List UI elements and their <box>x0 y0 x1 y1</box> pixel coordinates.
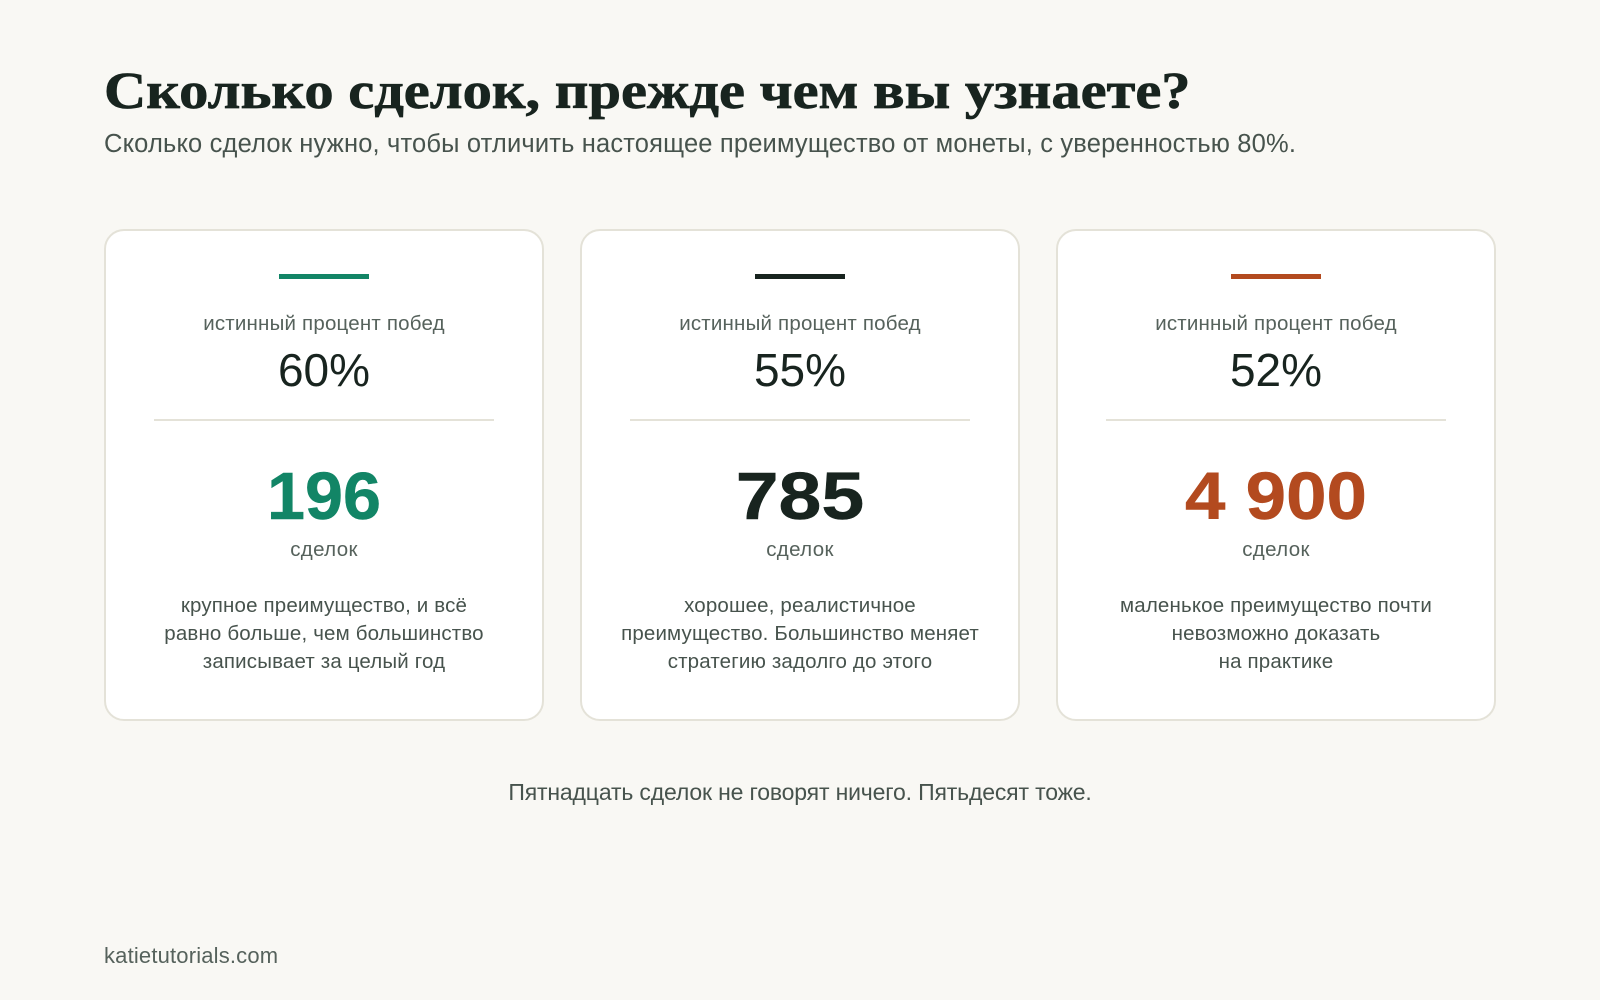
description <box>621 594 979 673</box>
description: равно больше, чем большинство <box>164 622 484 645</box>
accent bar: dark <box>755 274 845 279</box>
closing statement: Пятнадцать сделок не говорят ничего. Пятьдесят тоже. <box>508 779 1092 805</box>
panel: 60% win rate <box>104 229 544 721</box>
trade count: 785 <box>736 459 864 534</box>
description: преимущество. Большинство меняет <box>621 622 979 645</box>
label: true win rate: истинный процент побед <box>1155 312 1397 335</box>
description <box>1120 594 1432 673</box>
description: на практике <box>1219 650 1333 673</box>
description: хорошее, реалистичное <box>684 594 916 617</box>
description: стратегию задолго до этого <box>668 650 932 673</box>
accent bar: rust <box>1231 274 1321 279</box>
label: true win rate: истинный процент побед <box>679 312 921 335</box>
title: Сколько сделок, прежде чем вы узнаете? <box>104 63 1191 120</box>
panel: 52% win rate <box>1056 229 1496 721</box>
win rate value: 55% <box>754 344 846 396</box>
description <box>164 594 484 673</box>
unit label: сделок <box>766 538 834 561</box>
unit label: сделок <box>1242 538 1310 561</box>
subtitle: Сколько сделок нужно, чтобы отличить настоящее преимущество от монеты, с уверенностью 80%. <box>104 130 1296 158</box>
label: true win rate: истинный процент побед <box>203 312 445 335</box>
trade count: 196 <box>267 459 381 534</box>
description: маленькое преимущество почти <box>1120 594 1432 617</box>
trade count: 4 900 <box>1185 459 1367 534</box>
description: невозможно доказать <box>1172 622 1380 645</box>
footer: site name: katietutorials.com <box>104 943 278 968</box>
panel: 55% win rate <box>580 229 1020 721</box>
win rate value: 60% <box>278 344 370 396</box>
description: записывает за целый год <box>203 650 445 673</box>
win rate value: 52% <box>1230 344 1322 396</box>
unit label: сделок <box>290 538 358 561</box>
description: крупное преимущество, и всё <box>181 594 467 617</box>
accent bar: green <box>279 274 369 279</box>
